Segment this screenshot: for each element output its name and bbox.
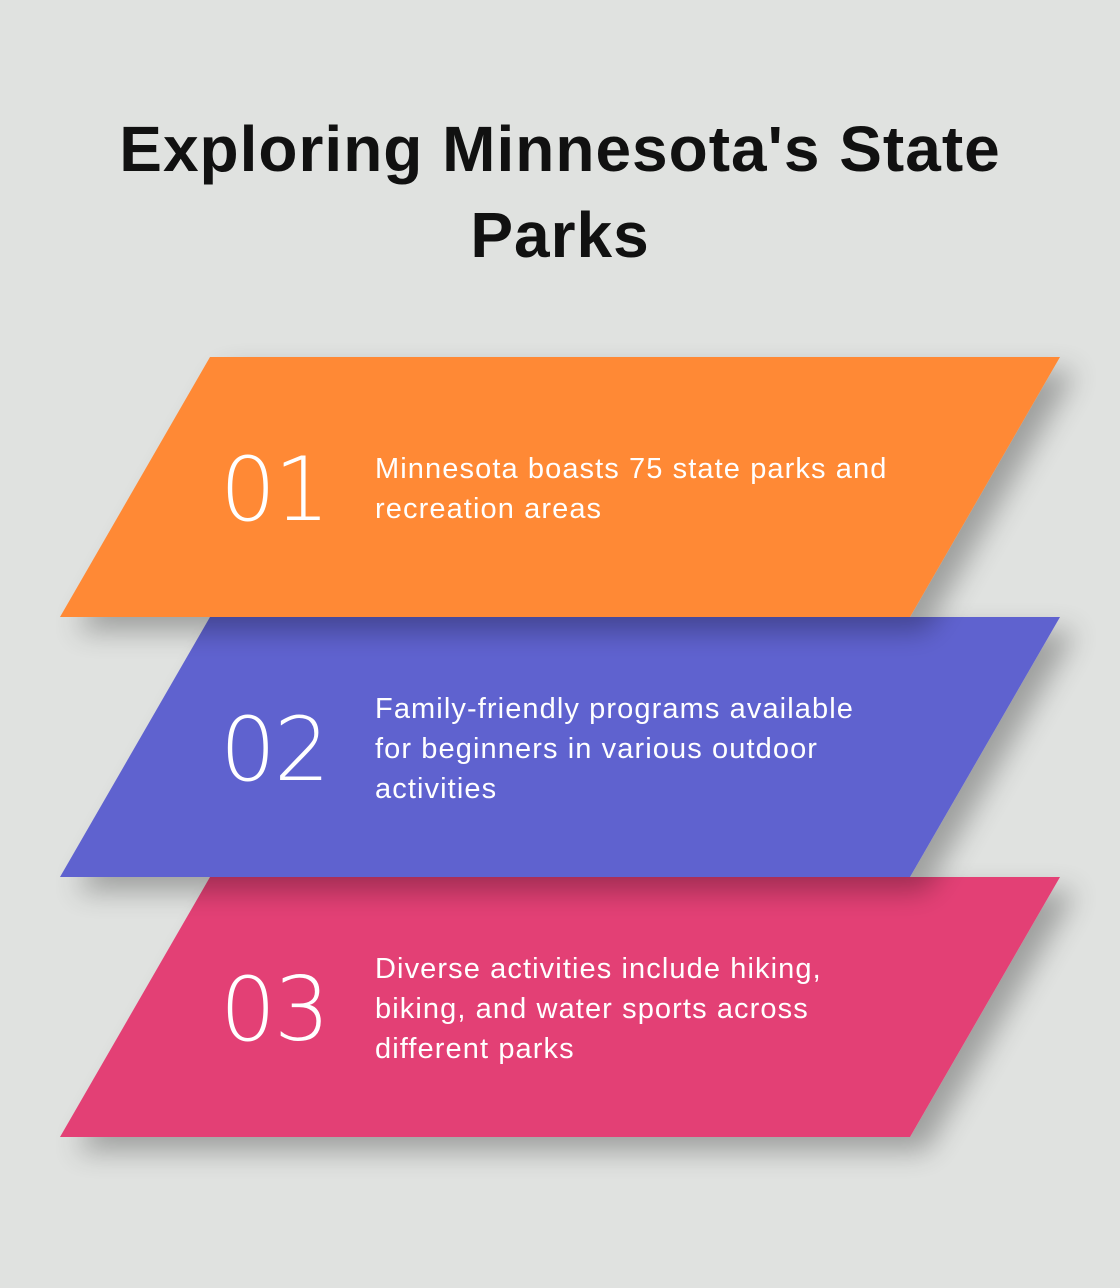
panel 3 shape	[60, 877, 1060, 1137]
title: Parks	[470, 199, 650, 271]
panel 1 number: 01	[220, 438, 328, 541]
panel 2 text: Family-friendly programs available for beginners in various outdoor activities	[375, 693, 854, 805]
panel 1 text: Minnesota boasts 75 state parks and recreation areas	[375, 453, 887, 525]
title	[119, 113, 1001, 271]
panel 2 shape	[60, 617, 1060, 877]
panel 3 number: 03	[220, 958, 328, 1061]
panel 3 text: Diverse activities include hiking, biking, and water sports across different parks	[375, 953, 822, 1065]
title: Exploring Minnesota's State	[119, 113, 1001, 185]
panel 2 number: 02	[220, 698, 328, 801]
panel 1 shape	[60, 357, 1060, 617]
